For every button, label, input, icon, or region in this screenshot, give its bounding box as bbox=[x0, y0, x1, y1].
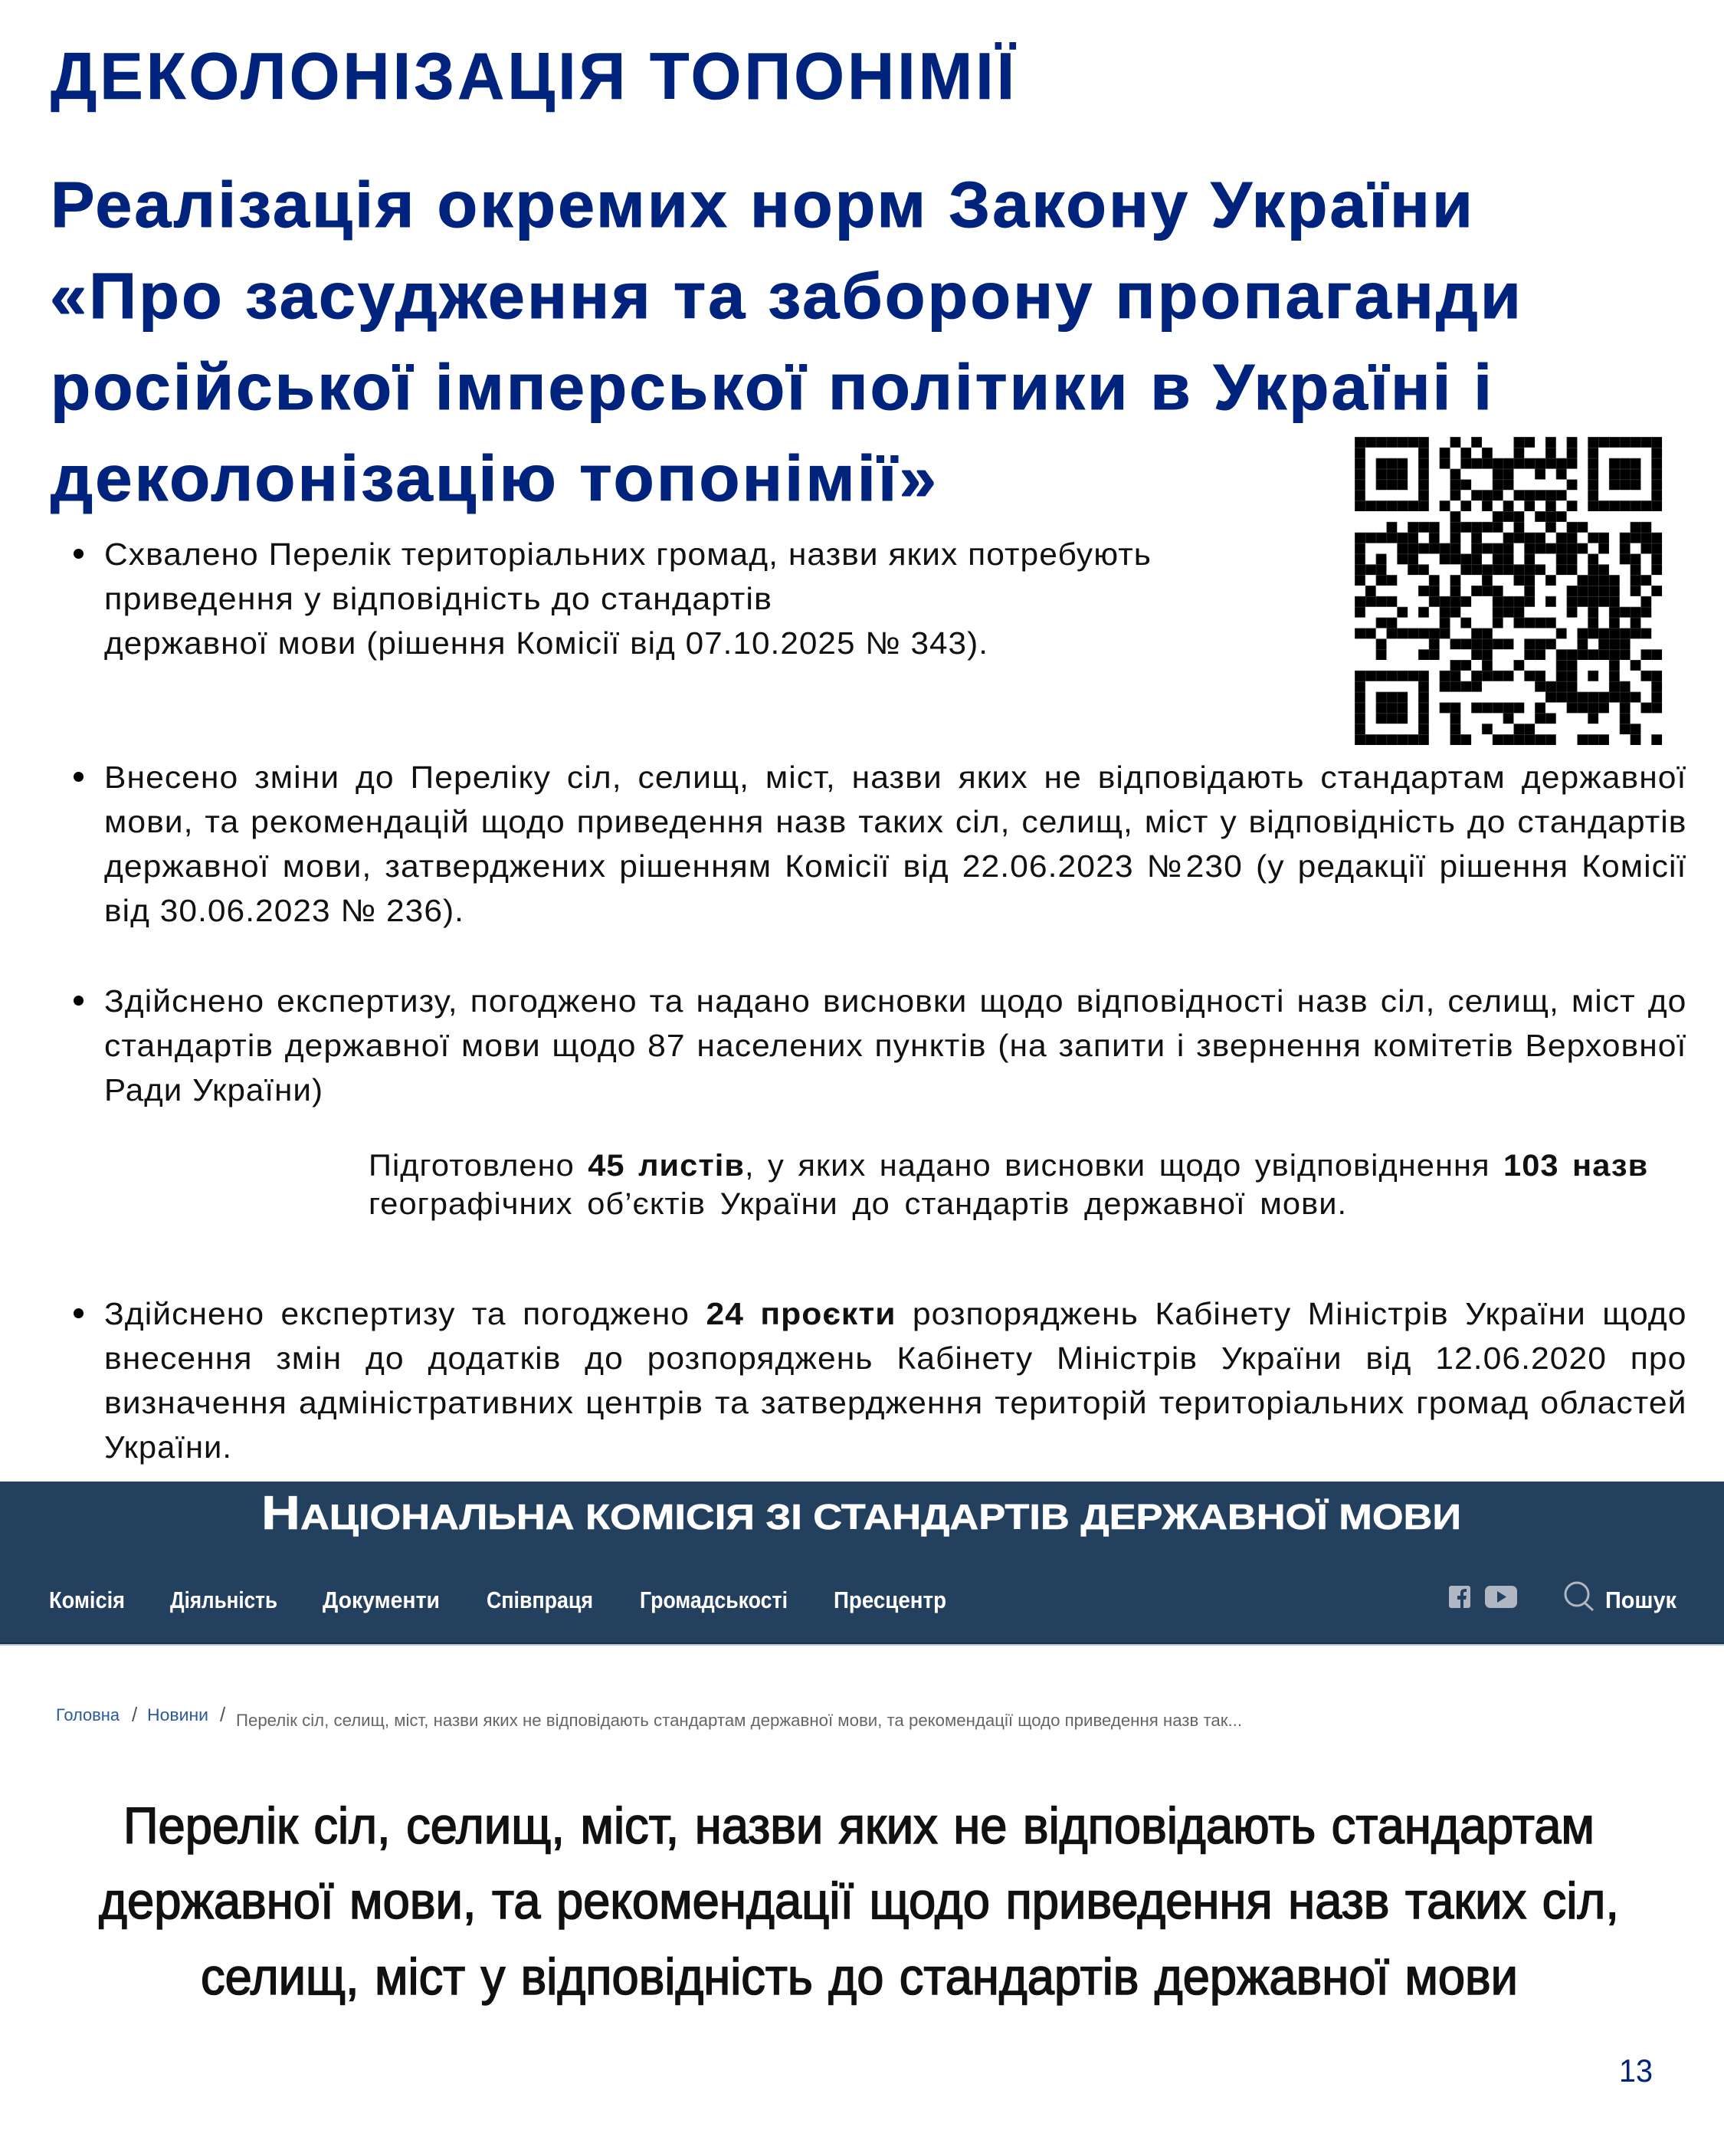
article title: селищ, міст у відповідність до стандартів державної мови bbox=[201, 1948, 1518, 2006]
bullet: approved list of communities bbox=[74, 537, 1152, 661]
navigation menu: Документи bbox=[323, 1587, 440, 1613]
navigation menu: Діяльність bbox=[170, 1587, 277, 1613]
heading: law name: російської імперської політики в Україні і bbox=[51, 351, 1494, 423]
navigation menu: Громадськості bbox=[640, 1587, 788, 1613]
article title: державної мови, та рекомендації щодо приведення назв таких сіл, bbox=[99, 1872, 1619, 1930]
bullet: 24 draft orders: визначення адміністративних центрів та затвердження територій територіальних громад областей bbox=[104, 1385, 1686, 1420]
page number: 13 bbox=[1619, 2053, 1653, 2089]
breadcrumb: / bbox=[220, 1703, 226, 1726]
heading: law name: «Про засудження та заборону пропаганди bbox=[50, 260, 1523, 332]
bullet: amendments to the list of settlements: мови, та рекомендацій щодо приведення назв таких сіл, селищ, міст у відповідність до стандартів bbox=[104, 804, 1686, 839]
breadcrumb: Головна bbox=[56, 1705, 120, 1724]
bullet: 24 draft orders: внесення змін до додатків до розпоряджень Кабінету Міністрів України від 12.06.2020 про bbox=[104, 1341, 1686, 1376]
bullet: expert review of 87 settlements: Ради України) bbox=[104, 1072, 323, 1108]
bullet: amendments to the list of settlements: Внесено зміни до Переліку сіл, селищ, міст, назви яких не відповідають стандартам державної bbox=[104, 760, 1686, 795]
screenshot: commission website banner bbox=[0, 1482, 1724, 1646]
callout: 45 letters, 103 names: географічних об’єктів України до стандартів державної мови. bbox=[369, 1187, 1347, 1221]
bullet: 24 draft orders bbox=[74, 1296, 1686, 1465]
bullet: approved list of communities: приведення у відповідність до стандартів bbox=[104, 581, 772, 616]
navigation menu: Пресцентр bbox=[834, 1587, 946, 1613]
bullet: expert review of 87 settlements bbox=[74, 983, 1686, 1108]
callout: 45 letters, 103 names bbox=[369, 1149, 1648, 1221]
bullet: amendments to the list of settlements bbox=[74, 760, 1686, 928]
bullet: expert review of 87 settlements: Здійснено експертизу, погоджено та надано висновки щодо відповідності назв сіл, селищ, міст до bbox=[104, 983, 1686, 1019]
breadcrumb: Перелік сіл, селищ, міст, назви яких не відповідають стандартам державної мови, та рекомендації щодо приведення назв так... bbox=[236, 1711, 1242, 1730]
bullet: 24 draft orders: України. bbox=[104, 1429, 232, 1465]
icon: search bbox=[1565, 1583, 1593, 1610]
breadcrumb bbox=[56, 1703, 1242, 1730]
article title: Перелік сіл, селищ, міст, назви яких не відповідають стандартам bbox=[123, 1797, 1595, 1855]
breadcrumb: / bbox=[132, 1703, 138, 1726]
breadcrumb: Новини bbox=[147, 1705, 208, 1724]
bullet: expert review of 87 settlements: стандартів державної мови щодо 87 населених пунктів (на запити і звернення комітетів Верховної bbox=[104, 1028, 1686, 1063]
heading: law name: деколонізацію топонімії» bbox=[51, 442, 939, 514]
navigation menu: Співпраця bbox=[487, 1587, 593, 1613]
navigation menu: Комісія bbox=[49, 1587, 125, 1613]
callout: 45 letters, 103 names: Підготовлено 45 листів, у яких надано висновки щодо увідповіднення 103 назв bbox=[369, 1149, 1648, 1183]
banner title: НАЦІОНАЛЬНА КОМІСІЯ ЗІ СТАНДАРТІВ ДЕРЖАВНОЇ МОВИ bbox=[261, 1487, 1461, 1540]
icon: QR code bbox=[1355, 437, 1662, 745]
bullet: approved list of communities: державної мови (рішення Комісії від 07.10.2025 № 343). bbox=[104, 625, 988, 661]
bullet: amendments to the list of settlements: від 30.06.2023 № 236). bbox=[104, 893, 464, 928]
search label: Пошук bbox=[1605, 1587, 1676, 1613]
bullet: approved list of communities: Схвалено Перелік територіальних громад, назви яких потребують bbox=[104, 537, 1152, 572]
icon: youtube bbox=[1485, 1586, 1517, 1608]
bullet: 24 draft orders: Здійснено експертизу та погоджено 24 проєкти розпоряджень Кабінету Міністрів України щодо bbox=[104, 1296, 1686, 1331]
heading: law name bbox=[50, 169, 1523, 514]
heading: law name: Реалізація окремих норм Закону України bbox=[51, 169, 1475, 241]
bullet: amendments to the list of settlements: державної мови, затверджених рішенням Комісії від 22.06.2023 №230 (у редакції рішення Комісії bbox=[104, 848, 1686, 884]
article title bbox=[99, 1797, 1619, 2006]
navigation menu bbox=[49, 1587, 946, 1613]
icon: facebook bbox=[1449, 1586, 1470, 1608]
title: ДЕКОЛОНІЗАЦІЯ ТОПОНІМІЇ bbox=[51, 40, 1018, 113]
